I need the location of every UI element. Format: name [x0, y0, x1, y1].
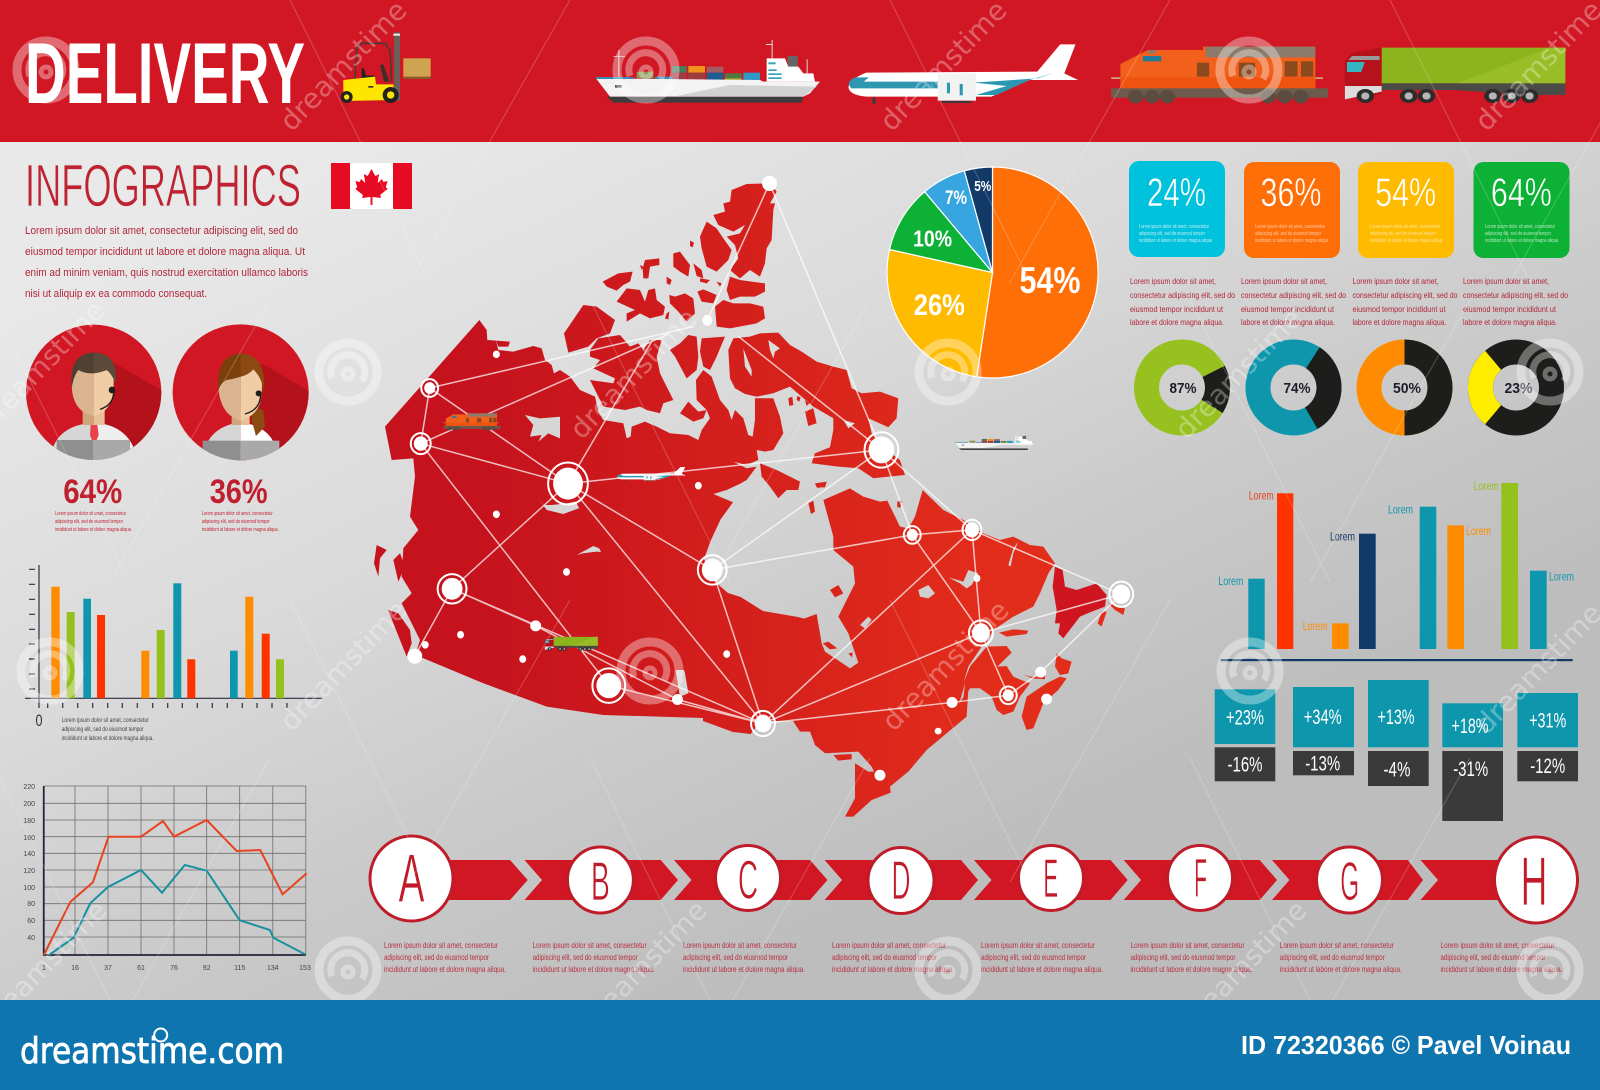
step captions: incididunt ut labore et dolore magna aliqua.	[1280, 964, 1402, 974]
step captions: Lorem ipsum dolor sit amet, consectetur	[533, 940, 647, 950]
stat card: 36%: adipiscing elit, sed do eiusmod tempor	[1255, 231, 1321, 237]
line chart: 37	[104, 965, 112, 972]
labelled bar chart: Lorem	[1218, 574, 1243, 588]
step captions: adipiscing elit, sed do eiusmod tempor	[1130, 952, 1236, 962]
step captions: Lorem ipsum dolor sit amet, consectetur	[832, 940, 946, 950]
text columns under cards: labore et dolore magna aliqua.	[1463, 317, 1557, 327]
text columns under cards: labore et dolore magna aliqua.	[1241, 317, 1335, 327]
pie chart	[887, 167, 1098, 378]
step captions: adipiscing elit, sed do eiusmod tempor	[533, 952, 638, 962]
plus/minus comparison boxes: +23%	[1226, 706, 1264, 730]
stat: 36% with caption: incididunt ut labore et dolore magna aliqua.	[202, 527, 279, 533]
stat card: 64%: 64%	[1491, 171, 1552, 215]
plus/minus comparison boxes: -12%	[1530, 755, 1565, 778]
network nodes	[407, 176, 1133, 781]
footer bar	[0, 1000, 1600, 1090]
avatar: female operator	[172, 324, 309, 460]
step captions: Lorem ipsum dolor sit amet, consectetur	[981, 940, 1095, 950]
icon: train on map	[443, 413, 500, 430]
step captions: adipiscing elit, sed do eiusmod tempor	[981, 952, 1086, 962]
stat card: 64%: Lorem ipsum dolor sit amet, consectetur	[1485, 224, 1555, 230]
intro paragraph: Lorem ipsum dolor sit amet, consectetur adipiscing elit, sed do	[25, 225, 298, 237]
line chart: 80	[27, 901, 35, 908]
text columns under cards: Lorem ipsum dolor sit amet,	[1130, 276, 1216, 286]
text columns under cards: eiusmod tempor incididunt ut	[1130, 304, 1224, 314]
labelled bar chart: Lorem	[1303, 619, 1328, 633]
labelled bar chart: Lorem	[1466, 524, 1491, 538]
stat: 64% with caption: incididunt ut labore et dolore magna aliqua.	[55, 527, 132, 533]
line chart: 16	[71, 965, 79, 972]
stat: 64% with caption: Lorem ipsum dolor sit amet, consectetur	[55, 511, 126, 517]
stat card: 24%: incididunt ut labore et dolore magna aliqua	[1139, 238, 1212, 244]
icon: truck	[1345, 48, 1565, 103]
pie chart: 54%	[1020, 260, 1080, 301]
line chart	[23, 784, 311, 972]
text columns under cards: Lorem ipsum dolor sit amet,	[1352, 276, 1438, 286]
line chart: 220	[23, 784, 35, 791]
text columns under cards: consectetur adipiscing elit, sed do	[1463, 290, 1568, 300]
icon: forklift	[341, 32, 431, 103]
step captions: incididunt ut labore et dolore magna aliqua.	[384, 964, 506, 974]
donut chart: 74%	[1244, 338, 1343, 437]
step captions: Lorem ipsum dolor sit amet, consectetur	[1280, 940, 1394, 950]
stat card: 54%: adipiscing elit, sed do eiusmod tempor	[1370, 231, 1436, 237]
text columns under cards: consectetur adipiscing elit, sed do	[1352, 290, 1458, 300]
intro paragraph: nisi ut aliquip ex ea commodo consequat.	[25, 288, 207, 300]
text columns under cards: Lorem ipsum dolor sit amet,	[1463, 276, 1549, 286]
step arrow band A to H	[370, 836, 1578, 923]
step captions: Lorem ipsum dolor sit amet, consectetur	[683, 940, 797, 950]
plus/minus comparison boxes: +13%	[1378, 706, 1414, 729]
step captions: adipiscing elit, sed do eiusmod tempor	[683, 952, 788, 962]
step captions: adipiscing elit, sed do eiusmod tempor	[384, 952, 489, 962]
pie chart: 5%	[974, 178, 991, 195]
step captions: Lorem ipsum dolor sit amet, consectetur	[1440, 940, 1555, 950]
pie chart: 26%	[914, 289, 965, 322]
plus/minus comparison boxes: -4%	[1384, 758, 1410, 782]
intro paragraph: enim ad minim veniam, quis nostrud exercitation ullamco laboris	[25, 267, 308, 279]
step captions	[384, 940, 1562, 974]
pie chart: 10%	[913, 226, 952, 252]
step captions: incididunt ut labore et dolore magna aliqua.	[683, 964, 805, 974]
bar chart caption: incididunt ut labore et dolore magna aliqua.	[62, 736, 154, 742]
stat card: 36%: Lorem ipsum dolor sit amet, consectetur	[1255, 224, 1325, 230]
line chart: 1	[42, 965, 46, 972]
intro paragraph: eiusmod tempor incididunt ut labore et dolore magna aliqua. Ut	[25, 246, 305, 258]
labelled bar chart: Lorem	[1474, 479, 1499, 493]
header band	[0, 0, 1600, 142]
stat card: 54%: incididunt ut labore et dolore magna aliqua	[1370, 238, 1443, 244]
labelled bar chart: Lorem	[1249, 488, 1274, 502]
stat card: 64%: incididunt ut labore et dolore magna aliqua	[1485, 238, 1558, 244]
labelled bar chart: Lorem	[1388, 502, 1413, 516]
footer logo text: dreamstime.com	[20, 1031, 284, 1072]
grouped bar chart	[25, 565, 322, 730]
stat: 36% with caption: 36%	[210, 473, 268, 511]
line chart: 134	[267, 965, 279, 972]
line chart: 153	[299, 965, 311, 972]
title: DELIVERY: DELIVERY	[25, 26, 305, 122]
stat card: 64%	[1474, 162, 1570, 258]
text columns under cards: consectetur adipiscing elit, sed do	[1241, 290, 1346, 300]
stat card: 54%: Lorem ipsum dolor sit amet, consectetur	[1370, 224, 1440, 230]
step arrow band A to H: C	[738, 848, 758, 910]
stat: 36% with caption	[202, 473, 279, 533]
map landmass	[374, 183, 1125, 817]
icon: airplane	[848, 44, 1078, 104]
step captions: adipiscing elit, sed do eiusmod tempor	[1280, 952, 1385, 962]
stat card: 64%: adipiscing elit, sed do eiusmod tempor	[1485, 231, 1551, 237]
text: dreamstime	[273, 594, 413, 737]
stat: 64% with caption: 64%	[63, 473, 122, 511]
stat card: 36%: incididunt ut labore et dolore magna aliqua	[1255, 238, 1328, 244]
map of Canada with network	[374, 176, 1133, 817]
donut chart: 23%	[1466, 337, 1566, 438]
step captions: incididunt ut labore et dolore magna aliqua.	[1130, 964, 1252, 974]
labelled bar chart	[1218, 479, 1574, 661]
plus/minus comparison boxes: -16%	[1228, 754, 1262, 776]
step arrow band A to H: H	[1520, 843, 1548, 920]
line chart: 115	[234, 965, 245, 972]
donut chart: 50%	[1369, 352, 1440, 423]
stat: 36% with caption: adipiscing elit, sed do eiusmod tempor	[202, 519, 270, 525]
pie chart: 7%	[945, 188, 967, 209]
step captions: incididunt ut labore et dolore magna aliqua.	[832, 964, 954, 974]
plus/minus comparison boxes: +18%	[1452, 715, 1488, 738]
step captions: adipiscing elit, sed do eiusmod tempor	[1440, 952, 1546, 962]
text: dreamstime	[875, 594, 1015, 737]
stat card: 36%: 36%	[1260, 171, 1322, 215]
line chart: 76	[170, 965, 178, 972]
text columns under cards: labore et dolore magna aliqua.	[1130, 317, 1224, 327]
grouped bar chart: 0	[36, 711, 42, 730]
bar chart caption: adipiscing elit, sed do eiusmod tempor	[62, 727, 144, 733]
stat card: 24%: adipiscing elit, sed do eiusmod tempor	[1139, 231, 1205, 237]
text: dreamstime	[573, 894, 713, 1037]
text: dreamstime	[1168, 302, 1308, 445]
step arrow band A to H: F	[1194, 847, 1207, 909]
stat card: 54%: 54%	[1375, 171, 1436, 215]
plus/minus comparison boxes: +34%	[1304, 706, 1342, 729]
plus/minus comparison boxes: -13%	[1305, 752, 1340, 776]
icon: locomotive	[1111, 47, 1328, 103]
plus/minus comparison boxes: -31%	[1453, 758, 1488, 781]
line chart: 40	[27, 935, 35, 942]
line chart: 100	[23, 885, 35, 892]
line chart: 140	[23, 851, 35, 858]
line chart: 60	[27, 918, 35, 925]
plus/minus comparison boxes: +31%	[1529, 710, 1566, 732]
step captions: incididunt ut labore et dolore magna aliqua.	[1440, 964, 1562, 974]
bar chart caption: Lorem ipsum dolor sit amet, consectetur	[62, 718, 149, 724]
text columns under cards	[1130, 276, 1568, 327]
line chart: 180	[23, 818, 35, 825]
step captions: Lorem ipsum dolor sit amet, consectetur	[1130, 940, 1245, 950]
step arrow band A to H: A	[398, 840, 424, 917]
line chart: 120	[23, 868, 35, 875]
step captions: adipiscing elit, sed do eiusmod tempor	[832, 952, 937, 962]
text columns under cards: eiusmod tempor incididunt ut	[1352, 304, 1446, 314]
stat: 36% with caption: Lorem ipsum dolor sit amet, consectetur	[202, 511, 273, 517]
bar chart caption	[62, 718, 154, 742]
text columns under cards: eiusmod tempor incididunt ut	[1241, 304, 1335, 314]
line chart: 92	[203, 965, 211, 972]
stat card: 54%	[1358, 162, 1454, 258]
stat card: 24%: Lorem ipsum dolor sit amet, consectetur	[1139, 224, 1209, 230]
text columns under cards: consectetur adipiscing elit, sed do	[1130, 290, 1235, 300]
stat card: 36%	[1244, 162, 1340, 258]
icon: ship on map	[955, 431, 1034, 450]
step arrow band A to H: G	[1340, 850, 1359, 912]
step captions: Lorem ipsum dolor sit amet, consectetur	[384, 940, 498, 950]
line chart: 61	[137, 965, 145, 972]
stat: 64% with caption: adipiscing elit, sed do eiusmod tempor	[55, 519, 123, 525]
network routes	[415, 183, 1121, 723]
line chart: 200	[23, 801, 35, 808]
step captions: incididunt ut labore et dolore magna aliqua.	[981, 964, 1103, 974]
donut chart: 23%: 23%	[1504, 380, 1532, 397]
icon: plane on map	[617, 467, 686, 481]
text columns under cards: Lorem ipsum dolor sit amet,	[1241, 276, 1327, 286]
heading: INFOGRAPHICS: INFOGRAPHICS	[25, 153, 301, 219]
avatar: male operator	[26, 324, 162, 460]
donut chart: 87%: 87%	[1170, 380, 1196, 397]
step captions: incididunt ut labore et dolore magna aliqua.	[533, 964, 655, 974]
text: dreamstime	[563, 302, 703, 445]
labelled bar chart: Lorem	[1549, 570, 1574, 584]
footer credit: ID 72320366 © Pavel Voinau	[1241, 1030, 1571, 1060]
step arrow band A to H: E	[1043, 847, 1058, 909]
text columns under cards: eiusmod tempor incididunt ut	[1463, 304, 1557, 314]
icon: Canadian flag	[331, 163, 412, 209]
donut chart: 50%: 50%	[1393, 380, 1421, 397]
step arrow band A to H: D	[892, 849, 910, 911]
labelled bar chart: Lorem	[1330, 530, 1355, 544]
stat: 64% with caption	[55, 473, 132, 533]
text: dreamstime	[1173, 894, 1313, 1037]
line chart: 160	[23, 835, 35, 842]
step arrow band A to H: B	[591, 850, 610, 912]
text columns under cards: labore et dolore magna aliqua.	[1352, 317, 1446, 327]
donut chart: 74%: 74%	[1284, 380, 1310, 397]
icon: truck on map	[545, 637, 598, 651]
donut chart: 87%	[1134, 340, 1230, 435]
plus/minus comparison boxes	[1215, 680, 1578, 821]
stat card: 24%: 24%	[1147, 171, 1206, 215]
stat card: 24%	[1129, 161, 1225, 257]
intro paragraph	[25, 225, 308, 300]
icon: cargo ship	[596, 40, 820, 103]
